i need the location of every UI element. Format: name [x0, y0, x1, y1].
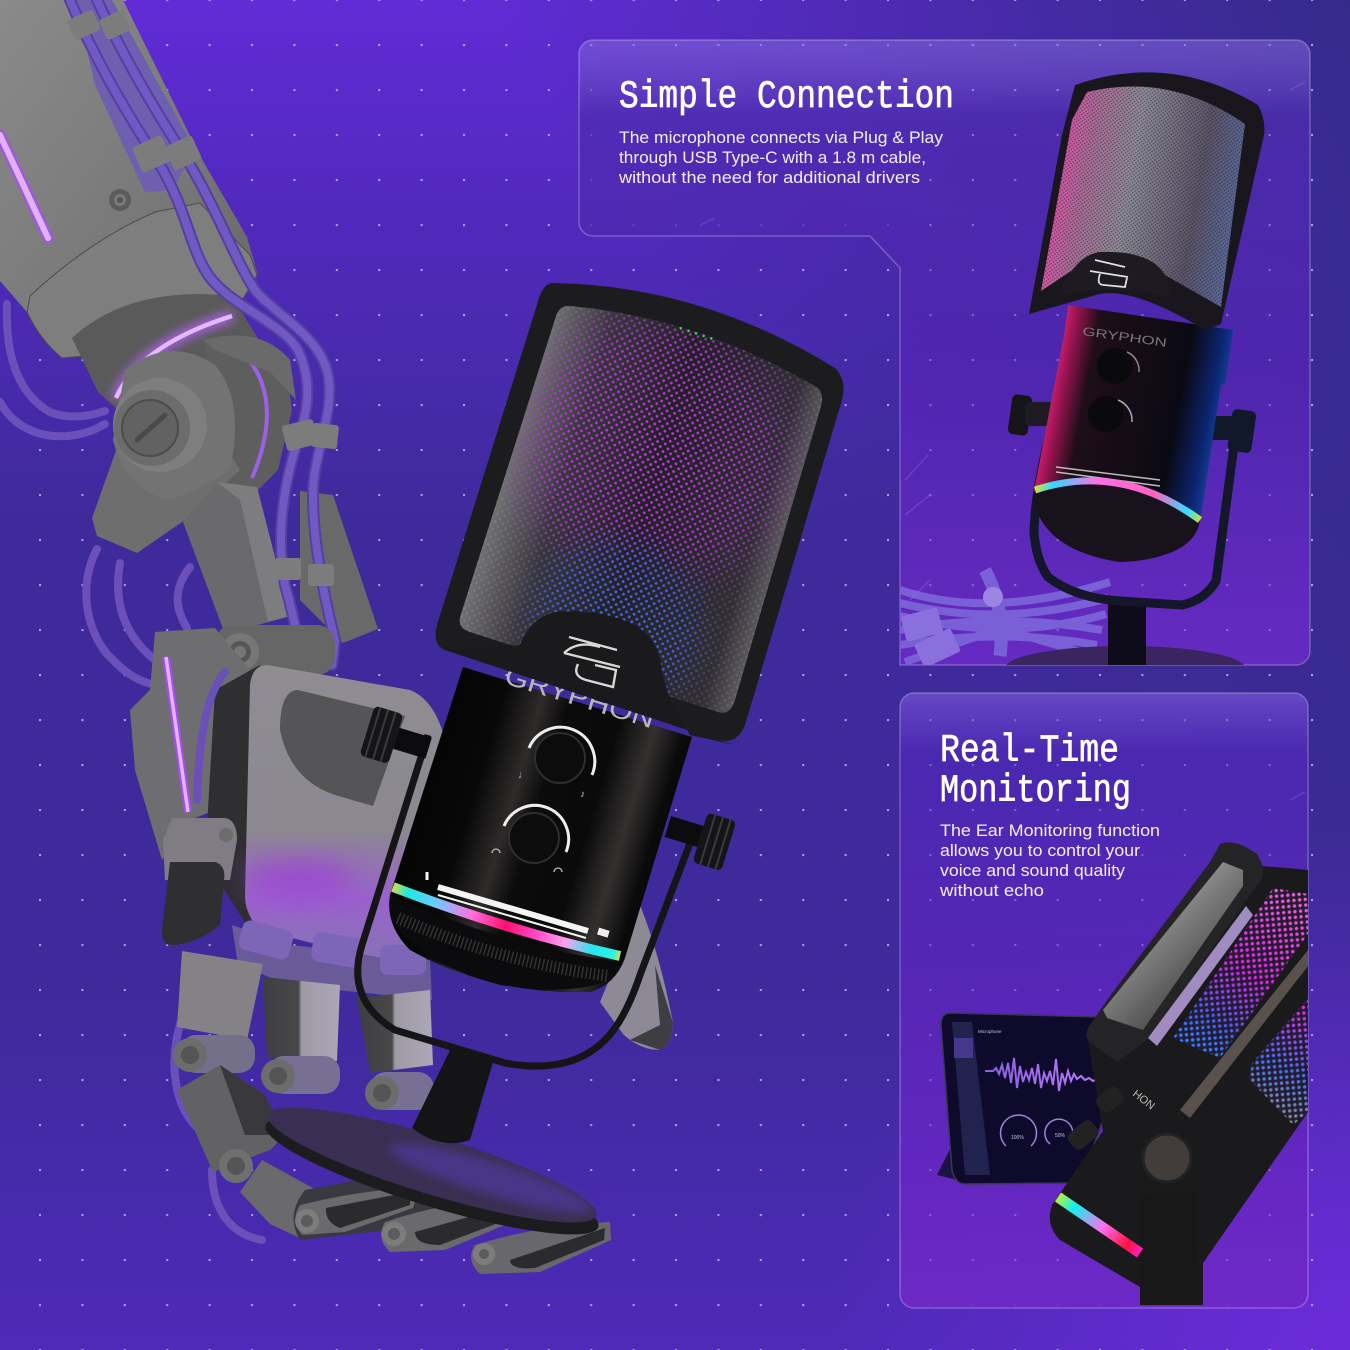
- right yoke knob: [660, 803, 736, 871]
- knobs: [1088, 348, 1139, 432]
- stem: [1108, 598, 1146, 668]
- text block: monitoring description: The Ear Monitoring function: [940, 822, 1160, 840]
- knuckles: [237, 919, 426, 975]
- gauges: 100%: [1011, 1135, 1024, 1141]
- upper filter frame: [1086, 842, 1263, 1062]
- finger segment 3: [357, 990, 433, 1073]
- monitor knob: [492, 805, 569, 872]
- finger lower joint: [219, 1149, 253, 1183]
- finger segment 2: [263, 977, 340, 1061]
- rgb ring: [1035, 481, 1200, 520]
- text block: simple connection description: The microphone connects via Plug & Play: [619, 129, 944, 147]
- sleeve ring: [1062, 305, 1233, 385]
- palm glow: [245, 860, 355, 896]
- text block: monitoring description: [939, 822, 1160, 900]
- mic tab: [954, 1038, 973, 1058]
- upper cover: [203, 336, 296, 400]
- bars: [1056, 467, 1160, 486]
- mid mesh: [1148, 906, 1253, 1046]
- mesh right: [1248, 998, 1308, 1125]
- wrist hub: [113, 351, 235, 500]
- gain knob: ♩: [518, 770, 528, 781]
- gauges: 50%: [1055, 1133, 1066, 1139]
- side knobs: [1068, 1098, 1099, 1150]
- desk base: [1006, 646, 1244, 665]
- heading: real-time monitoring: Monitoring: [940, 769, 1131, 813]
- text block: simple connection description: without the need for additional drivers: [618, 169, 920, 187]
- palm cable: [197, 672, 225, 800]
- panel 1 microphone: [900, 305, 1257, 690]
- text block: simple connection description: through USB Type-C with a 1.8 m cable,: [619, 149, 926, 167]
- body: [1050, 862, 1308, 1305]
- side knobs: [1007, 394, 1257, 453]
- pop filter frame: [436, 283, 843, 741]
- rgb ring: [393, 887, 620, 956]
- bottom grille: [390, 895, 620, 989]
- forearm shadow channel: [75, 0, 195, 192]
- upper filter mesh: [1103, 862, 1243, 1030]
- stand: [937, 1143, 965, 1182]
- heading: real-time monitoring: [940, 729, 1131, 813]
- left yoke knob: [360, 706, 436, 774]
- forearm collar band: [27, 203, 257, 358]
- panel 2 microphone: [1050, 842, 1308, 1305]
- sidebar: [952, 1022, 990, 1175]
- gauges: [1000, 1115, 1073, 1146]
- logo: [1090, 260, 1128, 287]
- wrist purple ring: [245, 355, 267, 478]
- thumb dark edge: [630, 965, 673, 1050]
- post: [1140, 1190, 1200, 1305]
- forearm shell: [0, 0, 257, 353]
- finger lower dark face: [220, 1065, 285, 1135]
- usb cable bundle: [900, 570, 1110, 668]
- body: [1034, 340, 1222, 562]
- rgb strip: [1058, 1197, 1140, 1253]
- mesh purple: [1173, 888, 1308, 1058]
- robot arm and hand: [0, 0, 673, 1240]
- text block: monitoring description: voice and sound quality: [940, 862, 1126, 880]
- panel 1 pop filter: [1029, 72, 1264, 330]
- desk base: [257, 1087, 607, 1256]
- level bars: [427, 872, 610, 938]
- finger lower segments: [177, 1065, 285, 1172]
- neck: [72, 294, 262, 430]
- wrist glow: [116, 316, 232, 398]
- yoke: [358, 735, 695, 1066]
- side plate: [130, 628, 250, 860]
- main microphone: [257, 283, 843, 1256]
- stem: [412, 1050, 493, 1143]
- panel: simple connection: [579, 40, 1310, 665]
- logo: [564, 637, 620, 687]
- joint above palm: [215, 625, 335, 675]
- text block: simple connection description: [618, 129, 944, 187]
- panel: real-time monitoring: [900, 693, 1308, 1308]
- collar: [1058, 252, 1172, 298]
- waveform: [985, 1058, 1113, 1091]
- grille: [1033, 484, 1200, 562]
- panel streak accents: [700, 82, 1305, 800]
- palm dark backing: [205, 665, 260, 930]
- finger joints: [173, 1035, 434, 1110]
- title: Microphone: [978, 1029, 1002, 1034]
- post knob: [1144, 1136, 1190, 1180]
- heading: simple connection: Simple Connection: [619, 75, 954, 119]
- mic body: [389, 667, 692, 992]
- prong shade: [217, 482, 290, 622]
- panel 2 tablet: [937, 1013, 1140, 1184]
- text block: monitoring description: without echo: [939, 882, 1044, 900]
- thumb: [600, 905, 673, 1050]
- wrist box: [162, 818, 237, 945]
- gain knob: [518, 727, 595, 800]
- heading: real-time monitoring: Real-Time: [940, 729, 1119, 773]
- logo collar: [445, 611, 735, 745]
- name: GRYPHON: [1082, 324, 1168, 350]
- knuckle strip: [232, 925, 432, 1000]
- mesh dot texture: [1041, 86, 1245, 307]
- gain knob: ♪: [580, 789, 585, 800]
- front cables: [70, 0, 335, 672]
- finger segment 1: [177, 951, 263, 1040]
- palm plate: [245, 665, 445, 965]
- tablet body: [941, 1013, 1140, 1184]
- fingertips under base: [294, 1170, 611, 1274]
- panel name: HON: [1130, 1088, 1157, 1112]
- green leds: [680, 328, 716, 340]
- forearm screw: [109, 189, 131, 211]
- model name: GRYPHON: [501, 660, 658, 734]
- highlight band: [1180, 950, 1308, 1118]
- mesh: [1041, 86, 1245, 307]
- front prong: [183, 482, 290, 634]
- cables behind arm: [0, 304, 262, 1240]
- finger lower segment 2: [240, 1160, 320, 1238]
- text block: monitoring description: allows you to control your: [940, 842, 1141, 860]
- yoke: [1034, 425, 1235, 605]
- back prong: [300, 491, 378, 643]
- cable clips: [67, 9, 339, 586]
- forearm light strip: [0, 135, 48, 238]
- wrist fork: [92, 415, 240, 553]
- pop filter mesh: [460, 306, 822, 713]
- side plate light strip: [166, 657, 188, 812]
- wrist cylinder: [205, 339, 292, 498]
- palm recess: [280, 690, 405, 806]
